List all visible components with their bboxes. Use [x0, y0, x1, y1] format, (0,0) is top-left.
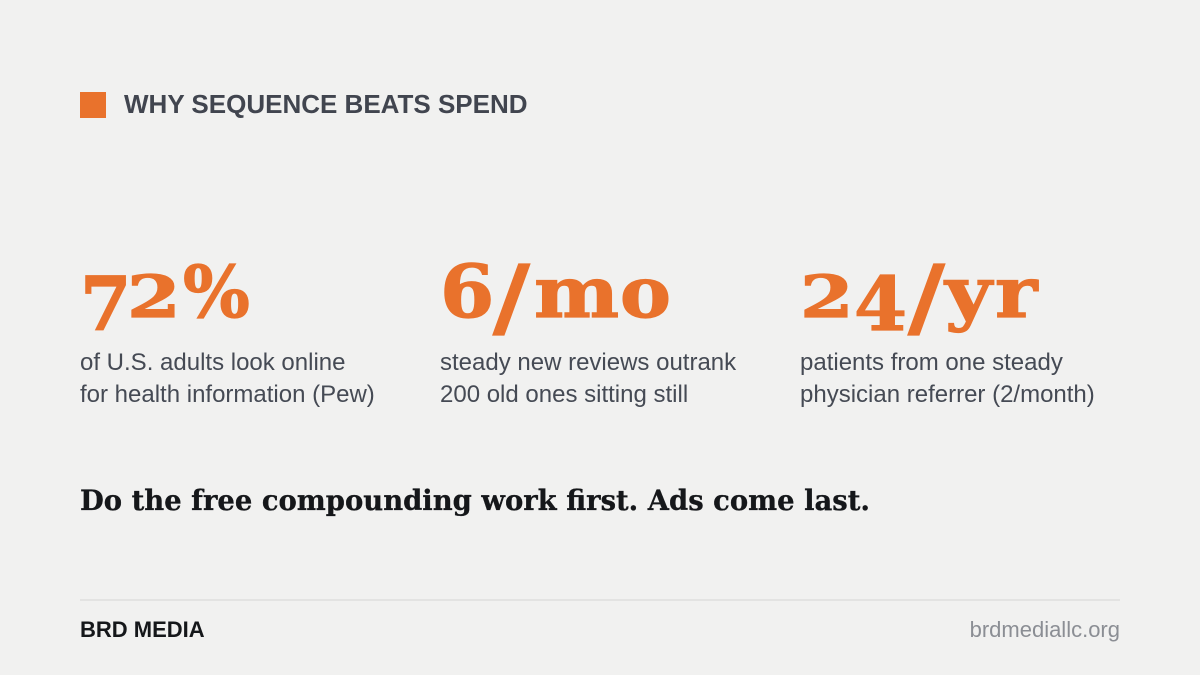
footer: [80, 599, 1120, 647]
stat number: 2: [127, 263, 181, 331]
stat caption: 200 old ones sitting still: [440, 381, 688, 408]
takeaway statement: Do the free compounding work first. Ads come last.: [80, 484, 870, 517]
stat caption: physician referrer (2/month): [800, 381, 1095, 408]
stat: 72%: [80, 250, 375, 408]
stat caption: [80, 349, 375, 408]
stat number: y: [945, 251, 992, 334]
stat number: 7: [80, 262, 132, 348]
stat number: /: [493, 247, 530, 348]
stat: 6/mo: [440, 247, 736, 408]
stat caption: of U.S. adults look online: [80, 349, 346, 376]
stat caption: [440, 349, 736, 408]
stat caption: for health information (Pew): [80, 381, 375, 408]
stat number: [440, 247, 671, 348]
stat number: [80, 250, 250, 348]
stat number: 4: [854, 262, 907, 348]
website: brdmediallc.org: [970, 617, 1120, 642]
stat number: o: [620, 251, 671, 334]
stat number: 6: [440, 249, 494, 335]
icon: orange square: [80, 92, 106, 118]
stat number: /: [908, 247, 945, 348]
stat number: m: [534, 251, 619, 334]
stat: 24/yr: [800, 247, 1095, 408]
stat number: %: [183, 250, 250, 334]
stat number: r: [995, 251, 1037, 334]
brand name: BRD MEDIA: [80, 617, 205, 642]
stat caption: [800, 349, 1095, 408]
header: [80, 89, 528, 119]
stat number: 2: [800, 263, 854, 331]
stat caption: steady new reviews outrank: [440, 349, 736, 376]
stat number: [800, 247, 1039, 348]
stat caption: patients from one steady: [800, 349, 1063, 376]
heading: WHY SEQUENCE BEATS SPEND: [124, 89, 528, 119]
